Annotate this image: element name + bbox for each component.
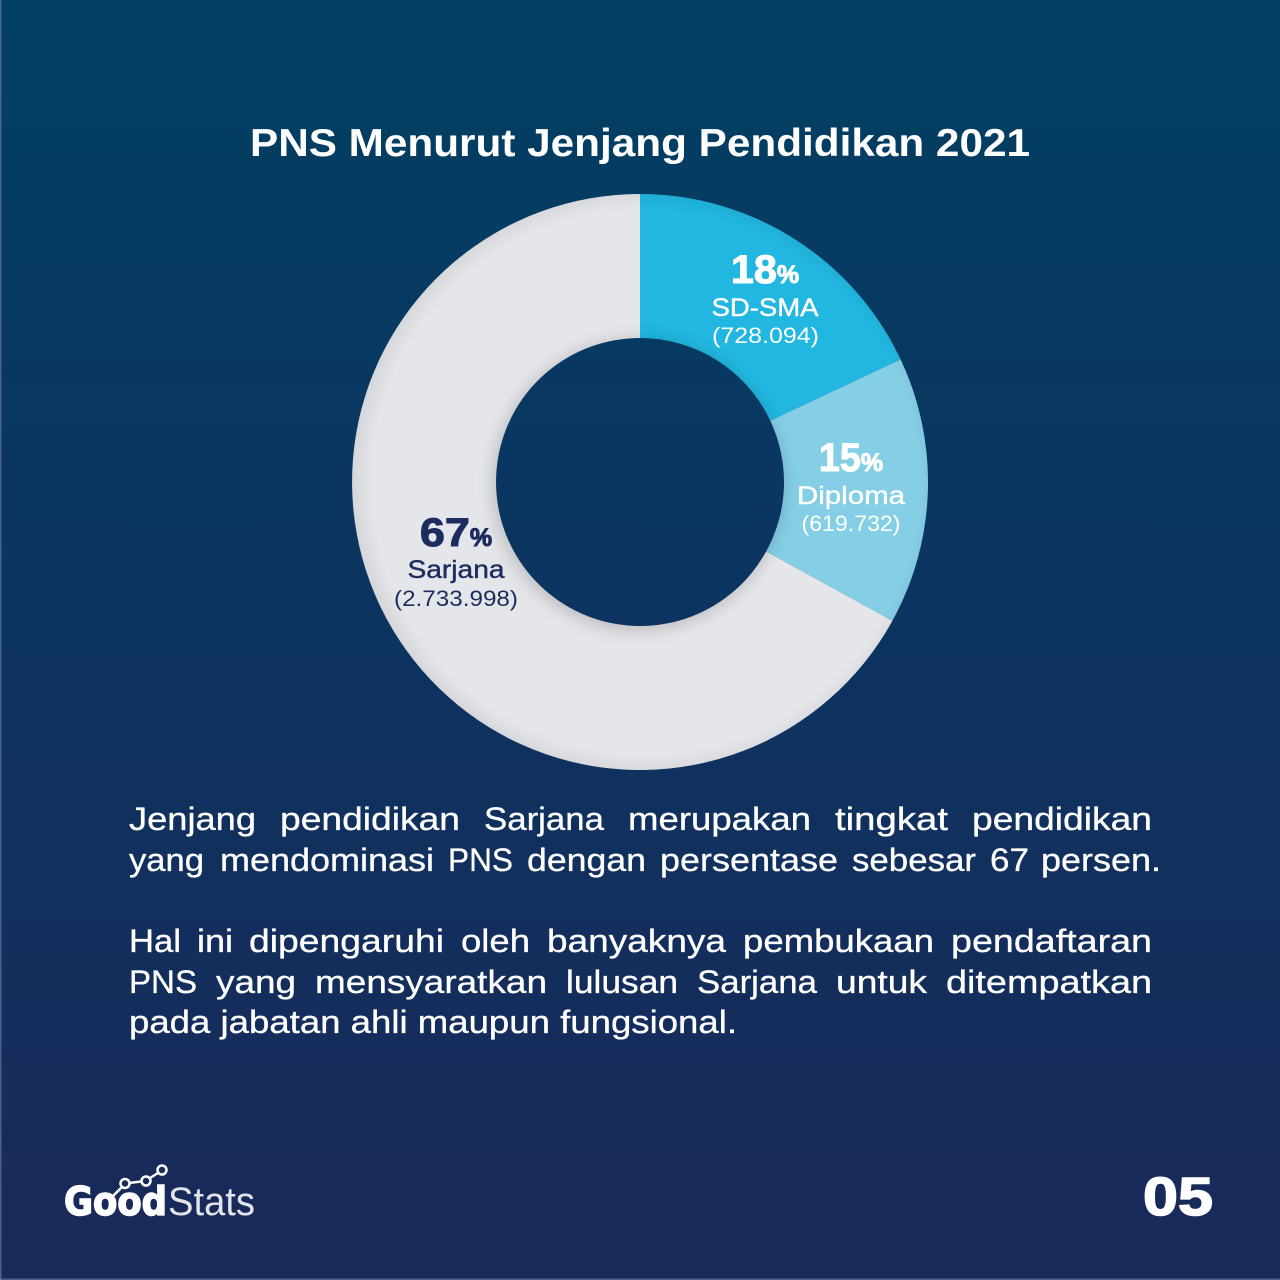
logo: GoodStats: Good bbox=[64, 1180, 167, 1225]
paragraph 1: yang bbox=[129, 842, 204, 878]
paragraph 1: persentase bbox=[660, 842, 838, 878]
label: Sarjana: (2.733.998) bbox=[394, 586, 518, 611]
paragraph 2 bbox=[129, 923, 1152, 1040]
paragraph 1: Sarjana bbox=[484, 801, 604, 837]
paragraph 2: pembukaan bbox=[743, 923, 934, 959]
paragraph 2: lulusan bbox=[566, 964, 678, 1000]
paragraph 1: pendidikan bbox=[280, 801, 460, 837]
page number: 05 bbox=[1143, 1167, 1213, 1227]
paragraph 2: ini bbox=[197, 923, 233, 959]
paragraph 2: ditempatkan bbox=[946, 964, 1152, 1000]
label: Sarjana: 67% bbox=[420, 511, 492, 555]
paragraph 1: 67 bbox=[990, 842, 1029, 878]
label: SD-SMA: (728.094) bbox=[712, 323, 819, 348]
paragraph 1 bbox=[129, 801, 1161, 878]
label: Diploma: 15% bbox=[819, 436, 883, 480]
paragraph 2: untuk bbox=[836, 964, 928, 1000]
label: Diploma: (619.732) bbox=[802, 511, 900, 536]
segment: Diploma 15% bbox=[766, 359, 928, 621]
paragraph 1: sebesar bbox=[852, 842, 976, 878]
paragraph 2: oleh bbox=[461, 923, 530, 959]
paragraph 1: Jenjang bbox=[129, 801, 256, 837]
paragraph 1: tingkat bbox=[835, 801, 948, 837]
segment: Sarjana 67% bbox=[352, 194, 892, 770]
paragraph 1: dengan bbox=[527, 842, 646, 878]
logo: GoodStats: Stats bbox=[168, 1180, 255, 1224]
title: PNS Menurut Jenjang Pendidikan 2021 bbox=[250, 122, 1030, 165]
label: Sarjana: Sarjana bbox=[408, 556, 505, 584]
paragraph 1: pendidikan bbox=[972, 801, 1152, 837]
paragraph 2: banyaknya bbox=[547, 923, 726, 959]
paragraph 1: PNS bbox=[448, 842, 513, 878]
paragraph 1: persen. bbox=[1041, 842, 1161, 878]
label: Diploma bbox=[797, 436, 905, 536]
paragraph 2: PNS bbox=[129, 964, 197, 1000]
label: Sarjana bbox=[394, 511, 518, 611]
paragraph 2: Sarjana bbox=[697, 964, 817, 1000]
label: SD-SMA bbox=[712, 248, 819, 348]
paragraph 2: pada jabatan ahli maupun fungsional. bbox=[129, 1004, 737, 1040]
paragraph 2: mensyaratkan bbox=[315, 964, 547, 1000]
ring shading bbox=[347, 189, 933, 775]
paragraph 1: merupakan bbox=[628, 801, 811, 837]
paragraph 2: dipengaruhi bbox=[249, 923, 444, 959]
label: SD-SMA: 18% bbox=[731, 248, 799, 292]
paragraph 2: Hal bbox=[129, 923, 181, 959]
label: SD-SMA: SD-SMA bbox=[712, 294, 819, 322]
icon: trend line bbox=[112, 1166, 166, 1197]
donut chart bbox=[347, 189, 933, 775]
paragraph 1: mendominasi bbox=[220, 842, 434, 878]
paragraph 2: pendaftaran bbox=[951, 923, 1152, 959]
logo: GoodStats bbox=[64, 1166, 255, 1225]
label: Diploma: Diploma bbox=[797, 482, 905, 510]
segment: SD-SMA 18% bbox=[640, 194, 901, 421]
paragraph 2: yang bbox=[216, 964, 296, 1000]
